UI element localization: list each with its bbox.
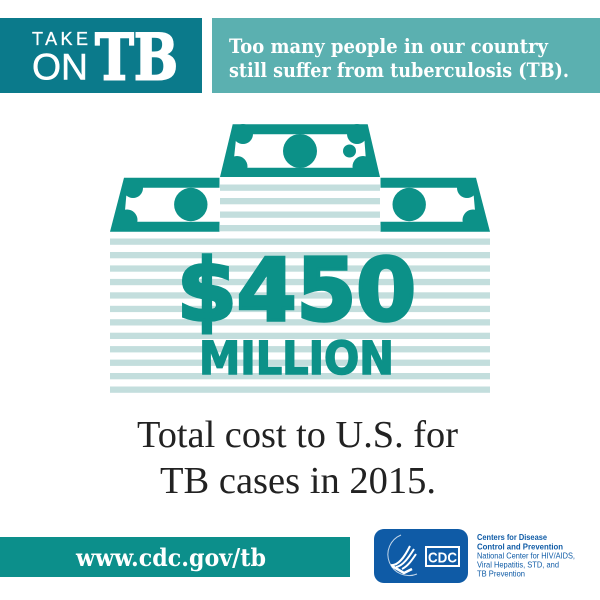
header message banner: Too many people in our country [229, 34, 549, 58]
CDC logo [374, 529, 468, 583]
caption: total cost: Total cost to U.S. for [137, 414, 458, 456]
header logo: Take on TB: TAKE [32, 29, 88, 49]
icon: HHS seal [388, 535, 417, 576]
CDC agency text [477, 533, 575, 578]
icon: top center bill [220, 124, 380, 177]
CDC agency text: TB Prevention [477, 570, 525, 578]
icon: left bill [110, 178, 220, 232]
CDC agency text: Control and Prevention [477, 542, 563, 552]
header logo: Take on TB: ON [32, 46, 88, 88]
CDC logo: CDC [428, 550, 457, 566]
CDC agency text: Viral Hepatitis, STD, and [477, 560, 559, 570]
icon: right bill [380, 178, 490, 232]
caption: total cost: TB cases in 2015. [160, 460, 436, 502]
header message banner [212, 18, 600, 93]
caption: total cost [137, 414, 458, 502]
CDC agency text: Centers for Disease [477, 533, 547, 542]
header logo: Take on TB [0, 18, 202, 96]
footer URL bar: www.cdc.gov/tb [75, 543, 266, 572]
headline figure: $450: $450 [177, 241, 416, 341]
stack of bills stripes [110, 184, 490, 393]
headline unit: MILLION: MILLION [199, 332, 394, 385]
header logo: Take on TB: TB [95, 20, 178, 96]
CDC agency text: National Center for HIV/AIDS, [477, 552, 575, 560]
footer URL bar [0, 537, 350, 577]
